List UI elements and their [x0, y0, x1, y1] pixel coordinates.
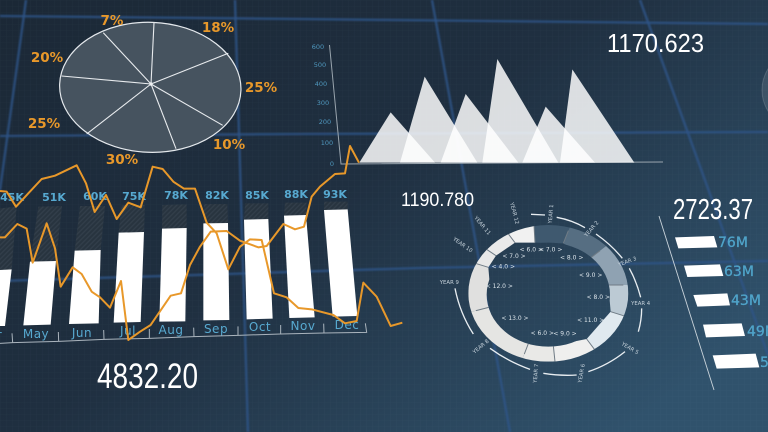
pie spokes: [62, 23, 228, 149]
orange line: second series: [0, 146, 359, 340]
value labels: 88K: [284, 188, 308, 201]
year labels: [439, 201, 651, 384]
pie labels: 18%: [202, 20, 235, 36]
year labels: YEAR 3: [617, 256, 637, 269]
pie labels: 25%: [245, 80, 278, 96]
outer ring arcs: [455, 214, 642, 375]
year labels: YEAR 11: [472, 215, 491, 237]
pie labels: 25%: [28, 116, 61, 132]
value labels: 51K: [42, 191, 66, 204]
list bars: [675, 236, 759, 369]
year labels: YEAR 5: [619, 341, 640, 356]
pie chart: [28, 13, 278, 168]
area axis labels: [312, 43, 334, 168]
pie disc: [57, 19, 243, 155]
inner value labels: < 12.0 >: [486, 283, 513, 290]
value labels: 45K: [0, 191, 24, 204]
list values: 76M: [718, 235, 748, 251]
pie labels: 10%: [213, 137, 246, 153]
area axis labels: 200: [319, 118, 331, 126]
pie labels: 30%: [106, 152, 139, 168]
month axis: [0, 323, 367, 343]
list values: 43M: [731, 293, 761, 309]
area axis labels: 400: [315, 80, 327, 88]
triangles: [359, 59, 634, 163]
donut segments: [468, 225, 628, 362]
bar backgrounds: [0, 202, 348, 270]
value labels: 93K: [323, 188, 347, 201]
area axis labels: 100: [321, 139, 333, 147]
year labels: YEAR 10: [451, 236, 474, 255]
month labels: Jul: [119, 324, 136, 338]
inner value labels: < 7.0 >: [502, 253, 526, 260]
year labels: YEAR 4: [630, 301, 651, 307]
area axis labels: 600: [312, 43, 324, 51]
month labels: Aug: [159, 323, 183, 337]
inner value labels: < 8.0 >: [587, 294, 610, 301]
value labels: 60K: [83, 190, 107, 203]
area axis labels: 0: [330, 160, 334, 168]
white bars: [0, 209, 357, 326]
slanted divider: [659, 216, 714, 390]
inner value labels: < 6.0 >: [520, 246, 543, 253]
month labels: Nov: [291, 319, 315, 333]
inner value labels: < 9.0 >: [553, 330, 577, 337]
year labels: YEAR 6: [577, 363, 587, 384]
year labels: YEAR 7: [533, 364, 540, 384]
month labels: Dec: [335, 318, 359, 332]
area chart: [312, 43, 663, 168]
orange line: first series: [0, 165, 402, 326]
list values: [718, 235, 768, 371]
month labels: Sep: [204, 322, 228, 336]
value labels: 85K: [245, 189, 269, 202]
value labels: 82K: [205, 189, 229, 202]
inner value labels: < 13.0 >: [501, 315, 529, 322]
inner value labels: < 4.0 >: [492, 263, 515, 270]
inner value labels: < 11.0 >: [577, 317, 604, 324]
month labels: Jun: [71, 326, 92, 340]
year labels: YEAR 12: [508, 201, 520, 225]
area axes: [330, 45, 663, 164]
value labels: 75K: [122, 190, 146, 203]
inner value labels: < 8.0 >: [560, 254, 583, 261]
value labels: [0, 188, 347, 204]
metric: 4832.20: 4832.20: [97, 357, 198, 396]
month labels: [0, 318, 359, 342]
list values: 63M: [724, 264, 754, 280]
inner value labels: < 7.0 >: [539, 246, 562, 253]
horizontal bar list: [659, 216, 768, 390]
bar chart: [0, 188, 367, 343]
area axis labels: 500: [314, 61, 326, 69]
month labels: Oct: [249, 320, 271, 334]
year labels: YEAR 9: [439, 280, 459, 286]
pie labels: [28, 13, 278, 168]
metric: 1190.780: 1190.780: [401, 189, 474, 211]
year labels: YEAR 8: [471, 338, 491, 356]
donut chart: [439, 198, 651, 386]
area axis labels: 300: [317, 99, 329, 107]
pie labels: 7%: [101, 13, 124, 29]
inner value labels: < 6.0 >: [531, 330, 554, 337]
year labels: YEAR 2: [583, 220, 600, 239]
pie labels: 20%: [31, 50, 64, 66]
month labels: May: [23, 327, 49, 341]
inner value labels: < 9.0 >: [579, 272, 602, 279]
year labels: YEAR 1: [548, 204, 555, 225]
value labels: 78K: [164, 189, 188, 202]
inner value labels: [486, 246, 610, 337]
metric: 1170.623: 1170.623: [607, 28, 704, 58]
